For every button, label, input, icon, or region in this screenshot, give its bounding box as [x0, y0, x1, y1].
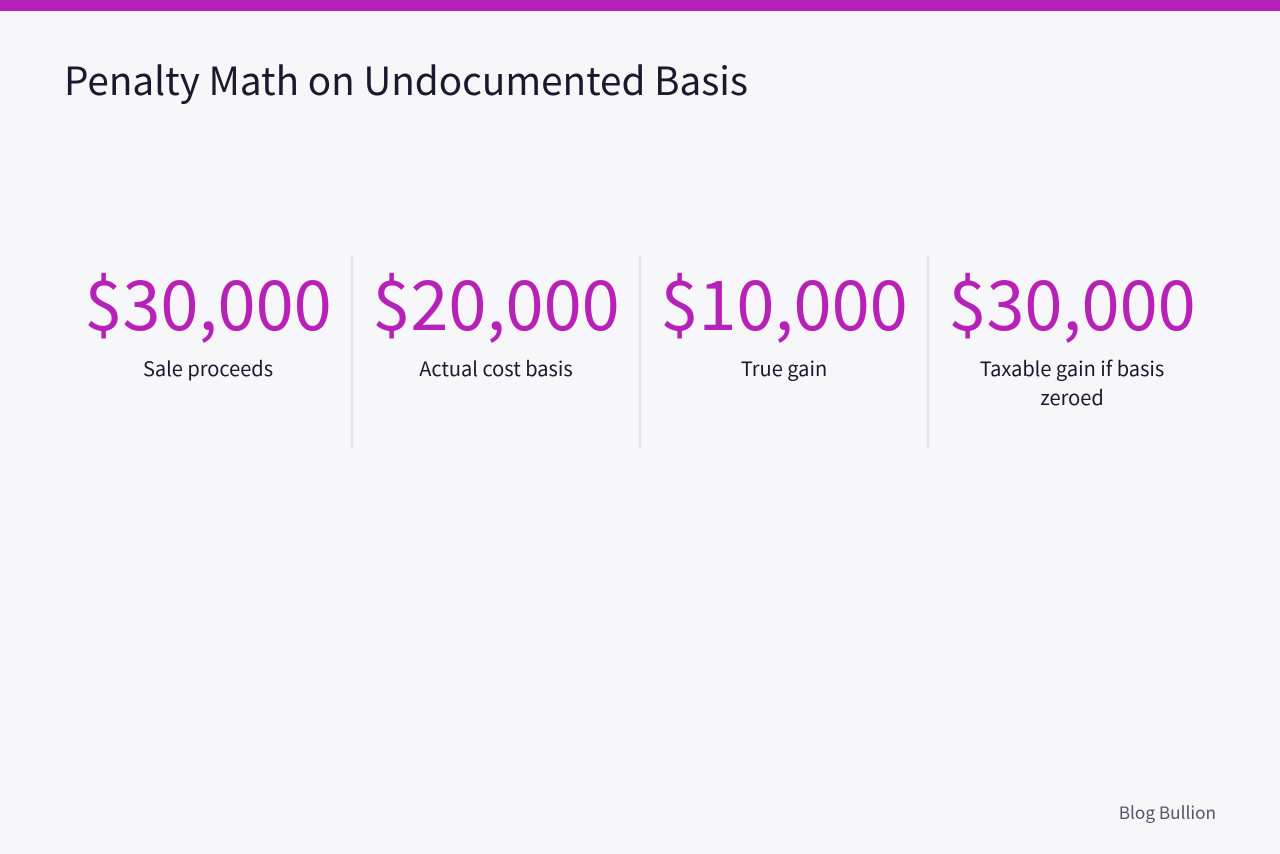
value: actual cost basis: $20,000: [372, 250, 620, 350]
panel: true gain: [660, 250, 908, 382]
panel: actual cost basis: [372, 250, 620, 382]
panel: taxable gain if basis zeroed: [948, 250, 1196, 411]
title: Penalty Math on Undocumented Basis: [64, 51, 748, 107]
label: true gain: True gain: [741, 353, 827, 382]
label: sale proceeds: Sale proceeds: [143, 353, 273, 382]
value: taxable gain: $30,000: [948, 250, 1196, 350]
top accent bar: [0, 0, 1280, 11]
value: true gain: $10,000: [660, 250, 908, 350]
panel: sale proceeds: [84, 250, 332, 382]
label: actual cost basis: Actual cost basis: [419, 353, 573, 382]
label: taxable gain: Taxable gain if basis zeroed: [980, 353, 1164, 411]
footer brand: Blog Bullion: [1119, 799, 1216, 824]
value: sale proceeds: $30,000: [84, 250, 332, 350]
